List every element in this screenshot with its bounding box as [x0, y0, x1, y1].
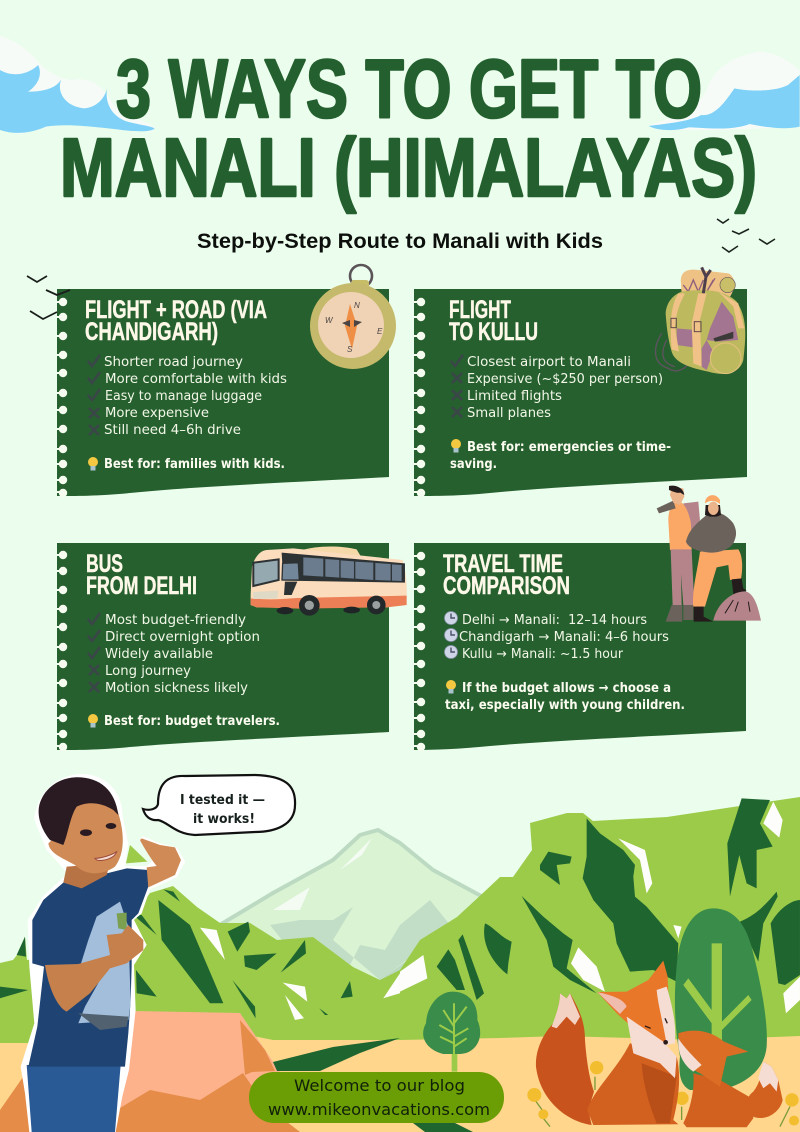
blog pill [249, 1072, 504, 1123]
heading [85, 296, 267, 346]
big fox body [587, 1043, 679, 1125]
spiral holes [414, 556, 421, 747]
big fox tail [536, 993, 594, 1125]
heading: COMPARISON [443, 572, 570, 600]
small fox tail tip [758, 1062, 778, 1092]
icon: backpack [656, 267, 745, 374]
shirt print green [117, 913, 127, 930]
pros and cons list: More comfortable with kids [105, 371, 287, 387]
birds top right [717, 219, 775, 252]
pros and cons list: Shorter road journey [104, 354, 243, 370]
panel: flight + road [57, 289, 389, 496]
heading: TRAVEL TIME [443, 550, 563, 578]
jeans [27, 1065, 121, 1132]
face [48, 802, 123, 873]
heading [86, 550, 197, 600]
big fox tail tip [552, 993, 580, 1028]
big fox leg shade [642, 1063, 677, 1123]
pros and cons list [105, 612, 260, 696]
scene: green mountains [0, 797, 800, 1050]
speech bubble: it works! [193, 812, 255, 827]
scene: small tree [423, 992, 480, 1072]
scene: orange rock [0, 1011, 300, 1132]
scene: pale distant mountain [223, 830, 484, 982]
icon: compass [310, 265, 396, 369]
heading: FLIGHT [449, 296, 511, 324]
pros and cons list: Closest airport to Manali [467, 354, 631, 370]
heading: CHANDIGARH) [85, 318, 218, 346]
travel times: Delhi → Manali: 12–14 hours [462, 612, 647, 628]
scene: ground [0, 1011, 800, 1132]
shirt print lower [78, 1013, 128, 1030]
pros and cons list: Easy to manage luggage [105, 388, 262, 404]
best for: Best for: families with kids. [104, 457, 285, 472]
best for: saving. [450, 457, 497, 472]
travel times [459, 612, 669, 662]
panel: bus from delhi [57, 543, 389, 750]
left cloud [0, 36, 155, 134]
pros and cons list: Expensive (~$250 per person) [467, 371, 663, 387]
icon: bulb [88, 714, 98, 728]
travel times: Kullu → Manali: ~1.5 hour [462, 646, 623, 662]
icon: compass: S [347, 345, 353, 354]
big fox head [597, 961, 675, 1045]
best for: Best for: budget travelers. [104, 714, 280, 729]
heading: BUS [86, 550, 123, 578]
small fox head [678, 1031, 748, 1087]
character: boy [21, 774, 185, 1132]
shirt print [78, 902, 131, 1023]
pros and cons list: Long journey [105, 663, 191, 679]
snow patches left [200, 928, 400, 1020]
heading [443, 550, 570, 600]
spiral holes [57, 302, 63, 493]
right cloud [649, 52, 800, 130]
heading [449, 296, 538, 346]
small fox tail [746, 1062, 783, 1118]
mouth [95, 852, 117, 860]
big fox ear [597, 992, 627, 1014]
icon: bulb [88, 457, 98, 470]
forearm and fist [45, 925, 143, 1012]
illustration: foxes [527, 961, 799, 1127]
snow patches right [400, 802, 800, 1013]
spiral holes [57, 555, 63, 747]
travel times: Chandigarh → Manali: 4–6 hours [459, 629, 669, 645]
small fox body [683, 1073, 753, 1127]
eyes [80, 823, 116, 836]
pros and cons list: Motion sickness likely [105, 680, 248, 696]
pros and cons list: More expensive [105, 405, 209, 421]
blog pill: www.mikeonvacations.com [268, 1100, 490, 1119]
heading: FROM DELHI [86, 572, 197, 600]
panel: travel time comparison [414, 543, 746, 750]
speech bubble: I tested it — [180, 793, 265, 808]
pros and cons list [104, 354, 287, 438]
advice [445, 681, 685, 713]
spiral holes [414, 302, 421, 493]
pros and cons list: Limited flights [467, 388, 562, 404]
blog pill: Welcome to our blog [294, 1076, 465, 1095]
pros and cons list: Widely available [105, 646, 213, 662]
icon: compass: N [354, 301, 360, 310]
pros and cons list: Still need 4–6h drive [104, 422, 241, 438]
panel: flight to kullu [414, 289, 747, 496]
raised arm [140, 838, 181, 887]
thumb-side green peak [126, 845, 147, 863]
scene: dark path [273, 1038, 473, 1132]
icon: compass: E [377, 327, 383, 336]
pros and cons marks [88, 355, 100, 435]
icon: hikers [657, 486, 761, 622]
speech bubble [143, 775, 295, 835]
pros and cons marks [451, 355, 463, 417]
dark rock facets right [437, 798, 800, 1000]
scene: big tree [675, 908, 767, 1090]
icon: bulb [451, 439, 461, 452]
big fox nose and eyes [645, 1018, 668, 1045]
flowers [527, 1061, 799, 1127]
shirt [28, 868, 148, 1067]
hair [39, 777, 118, 845]
dark rock facets left [0, 889, 353, 1018]
pros and cons list [467, 354, 663, 421]
advice: If the budget allows → choose a [462, 681, 671, 696]
best for: Best for: emergencies or time- [467, 440, 671, 455]
title [60, 42, 757, 214]
advice: taxi, especially with young children. [445, 698, 685, 713]
white cutout outline [21, 774, 185, 1132]
icon: bulb [446, 680, 456, 694]
heading: TO KULLU [449, 318, 538, 346]
small fox white face [678, 1038, 702, 1072]
birds left [27, 276, 70, 319]
big fox white face and chest [627, 987, 677, 1078]
pros and cons marks [88, 613, 100, 692]
pros and cons list: Small planes [467, 405, 551, 421]
best for [450, 440, 671, 472]
subtitle: Step-by-Step Route to Manali with Kids [197, 230, 603, 253]
icon: bus [251, 546, 407, 616]
heading: FLIGHT + ROAD (VIA [85, 296, 267, 324]
icons: clocks [444, 612, 458, 658]
pros and cons list: Most budget-friendly [105, 612, 246, 628]
neck [63, 863, 110, 888]
pros and cons list: Direct overnight option [105, 629, 260, 645]
icon: compass: W [325, 316, 334, 325]
